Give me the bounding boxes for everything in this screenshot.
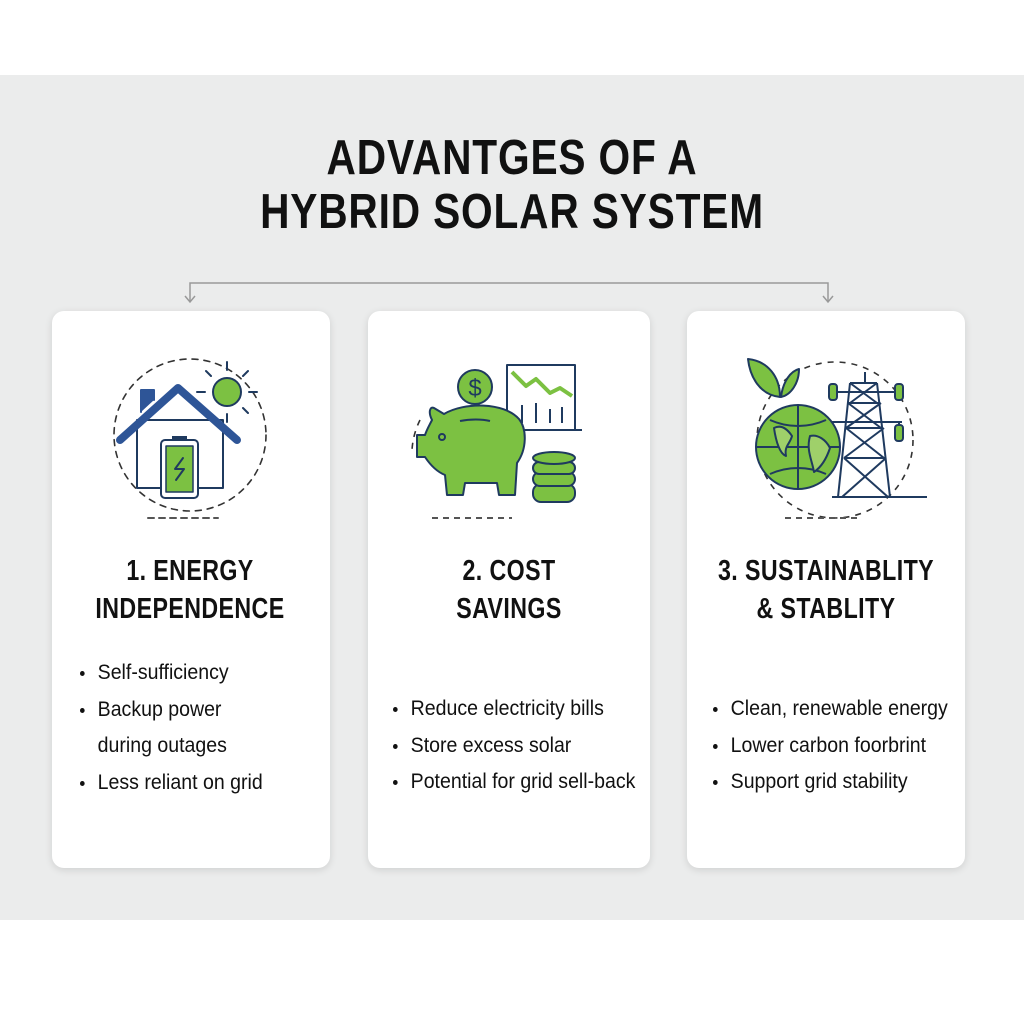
bullets: sustainability: Lower carbon foorbrint bbox=[731, 734, 926, 756]
bullets: energy independence: Backup power bbox=[98, 698, 221, 720]
heading: energy independence: 1. ENERGY bbox=[126, 555, 254, 587]
heading: energy independence bbox=[95, 555, 285, 625]
title: ADVANTGES OF A bbox=[327, 131, 697, 185]
title bbox=[260, 131, 764, 239]
card: cost savings bbox=[368, 311, 650, 868]
title: HYBRID SOLAR SYSTEM bbox=[260, 185, 764, 239]
bullets: cost savings: Potential for grid sell-back bbox=[411, 770, 635, 793]
connector arrow bbox=[185, 283, 833, 302]
heading: cost savings: 2. COST bbox=[462, 555, 556, 587]
bullets: cost savings: Store excess solar bbox=[411, 734, 571, 756]
bullets: sustainability: Clean, renewable energy bbox=[731, 697, 948, 720]
heading: cost savings bbox=[456, 555, 562, 625]
bullets: energy independence bbox=[80, 661, 263, 794]
heading: energy independence: INDEPENDENCE bbox=[95, 593, 285, 625]
bullets: sustainability: Support grid stability bbox=[731, 770, 908, 793]
card: sustainability bbox=[687, 311, 965, 868]
heading: sustainability: & STABLITY bbox=[757, 593, 895, 625]
icon: piggy bank, coin, chart: $ bbox=[468, 375, 482, 402]
card: energy independence bbox=[52, 311, 330, 868]
bullets: sustainability bbox=[713, 697, 948, 793]
bullets: cost savings: Reduce electricity bills bbox=[411, 697, 604, 720]
icon: piggy bank, coin, chart bbox=[412, 365, 582, 518]
bullets: energy independence: during outages bbox=[98, 734, 227, 757]
bullets: energy independence: Self-sufficiency bbox=[98, 661, 229, 684]
heading: sustainability: 3. SUSTAINABLITY bbox=[718, 555, 934, 587]
icon: globe, leaves, power tower bbox=[748, 359, 927, 518]
bullets: cost savings bbox=[393, 697, 636, 793]
heading: sustainability bbox=[718, 555, 934, 625]
bullets: energy independence: Less reliant on grid bbox=[98, 770, 263, 794]
icon: house with battery and sun bbox=[114, 359, 266, 518]
heading: cost savings: SAVINGS bbox=[456, 593, 562, 625]
